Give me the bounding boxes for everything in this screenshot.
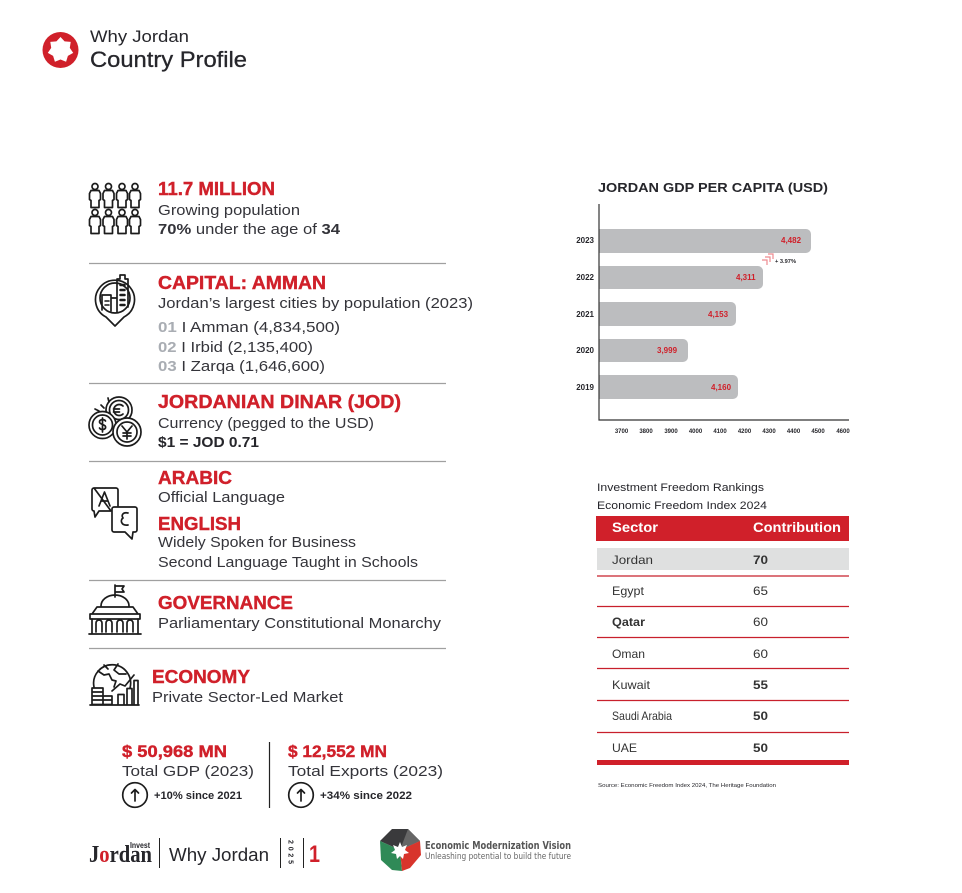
panel: population [90, 178, 341, 238]
icon: speech bubbles [92, 488, 137, 539]
x axis labels: 3900 [664, 429, 678, 435]
x axis labels: 4600 [836, 429, 850, 435]
table heading: Economic Freedom Index 2024 [597, 500, 767, 512]
footer: section name: Why Jordan [169, 845, 269, 865]
icon: people [90, 184, 140, 234]
growth chevrons [762, 254, 797, 265]
table rows: Qatar [612, 615, 645, 629]
table header [596, 516, 849, 541]
footer: Economic Modernization Vision logo: Economic Modernization Vision [425, 840, 571, 852]
stat: total GDP: +10% since 2021 [154, 790, 242, 802]
x axis labels [615, 429, 850, 435]
language text: Second Language Taught in Schools [158, 554, 418, 571]
highlighted row [597, 548, 849, 570]
year labels: 2021 [576, 310, 595, 319]
table rows: Saudi Arabia [612, 709, 672, 723]
stat: total GDP [122, 743, 254, 807]
capital text: 01 I Amman (4,834,500) [158, 319, 340, 336]
value labels: 3,999 [657, 346, 678, 355]
value labels: 4,482 [781, 236, 802, 245]
table rows: 50 [753, 741, 768, 755]
stat: total GDP: $ 50,968 MN [122, 743, 227, 761]
table rows: 60 [753, 615, 768, 629]
stat: total exports: +34% since 2022 [320, 790, 412, 802]
economy text: ECONOMY [152, 666, 251, 687]
stat: total exports [288, 743, 443, 807]
footer: page number: 1 [309, 841, 320, 868]
stat: total exports: Total Exports (2023) [288, 763, 443, 780]
population text [158, 178, 341, 238]
capital text: 03 I Zarqa (1,646,600) [158, 358, 325, 375]
bars [599, 229, 811, 399]
x axis labels: 3700 [615, 429, 629, 435]
capital text: CAPITAL: AMMAN [158, 272, 326, 293]
value labels: 4,311 [736, 273, 756, 282]
x axis labels: 4100 [713, 429, 727, 435]
table rows: Egypt [612, 584, 645, 598]
title: Country Profile [90, 47, 247, 72]
year labels: 2022 [576, 273, 595, 282]
language text: ARABIC [158, 467, 232, 488]
population text: 11.7 MILLION [158, 178, 275, 199]
year labels: 2019 [576, 383, 595, 392]
footer: year: 2025 [286, 840, 294, 864]
economy text: Private Sector-Led Market [152, 689, 344, 706]
value labels: 4,153 [708, 310, 729, 319]
panel: currency [89, 391, 401, 451]
language text [158, 467, 418, 571]
icon: vision emblem [380, 829, 421, 871]
table rows: Kuwait [612, 678, 651, 692]
footer: Invest Jordan logo: Invest [130, 841, 150, 850]
table rows: 70 [753, 553, 768, 567]
currency text [158, 391, 401, 451]
table rows: Oman [612, 647, 645, 661]
population text: 70% under the age of 34 [158, 221, 341, 238]
economy text [152, 666, 344, 706]
x axis labels: 4000 [689, 429, 703, 435]
table header: Contribution [753, 519, 841, 535]
year labels: 2020 [576, 346, 595, 355]
icon: globe and coins [90, 664, 139, 705]
table rows: 55 [753, 678, 768, 692]
chart title: JORDAN GDP PER CAPITA (USD) [598, 180, 828, 195]
panel: languages [92, 467, 418, 571]
growth chevrons: + 3.97% [775, 259, 797, 265]
governance text [158, 592, 442, 632]
currency text: Currency (pegged to the USD) [158, 415, 374, 432]
icon: coins [89, 397, 141, 446]
currency text: JORDANIAN DINAR (JOD) [158, 391, 401, 412]
stat: total GDP: Total GDP (2023) [122, 763, 254, 780]
language text: Official Language [158, 489, 285, 506]
icon: up arrow [123, 783, 147, 807]
table rows: UAE [612, 741, 637, 755]
currency text: $1 = JOD 0.71 [158, 434, 259, 451]
bar chart: GDP per capita [576, 204, 850, 435]
capital text [158, 272, 473, 375]
icon: city pin [96, 275, 135, 326]
table heading: Investment Freedom Rankings [597, 482, 765, 494]
title: Why Jordan [90, 27, 189, 46]
icon: red seal with star [42, 32, 78, 68]
title [90, 27, 247, 72]
x axis labels: 4500 [811, 429, 825, 435]
table rows: 65 [753, 584, 768, 598]
table header: Sector [612, 519, 659, 535]
stat: total exports: $ 12,552 MN [288, 743, 387, 761]
table rows: 50 [753, 709, 768, 723]
value labels: 4,160 [711, 383, 732, 392]
language text: ENGLISH [158, 513, 241, 534]
header [42, 27, 247, 72]
governance text: Parliamentary Constitutional Monarchy [158, 615, 442, 632]
year labels: 2023 [576, 236, 595, 245]
panel: capital [96, 272, 473, 375]
population text: Growing population [158, 202, 300, 219]
footer: Economic Modernization Vision logo: Unleashing potential to build the future [425, 852, 571, 862]
x axis labels: 4200 [738, 429, 752, 435]
panel: governance [89, 585, 442, 634]
icon: up arrow [289, 783, 313, 807]
capital text: Jordan’s largest cities by population (2023) [158, 295, 473, 312]
x axis labels: 4300 [762, 429, 776, 435]
source note: Source: Economic Freedom Index 2024, The Heritage Foundation [598, 783, 776, 789]
value labels [657, 236, 802, 392]
x axis labels: 4400 [787, 429, 801, 435]
x axis labels: 3800 [639, 429, 653, 435]
footer: Invest Jordan logo: Jordan [89, 842, 152, 868]
table rows: Jordan [612, 553, 653, 567]
panel: economy [90, 664, 344, 706]
footer: Economic Modernization Vision logo [380, 829, 571, 871]
year labels [576, 236, 595, 392]
icon: parliament [89, 585, 141, 634]
table: rankings [596, 516, 849, 765]
governance text: GOVERNANCE [158, 592, 293, 613]
table rows [612, 553, 768, 755]
language text: Widely Spoken for Business [158, 534, 356, 551]
table heading [597, 482, 767, 512]
capital text: 02 I Irbid (2,135,400) [158, 339, 313, 356]
axes [599, 204, 849, 420]
table rows: 60 [753, 647, 768, 661]
